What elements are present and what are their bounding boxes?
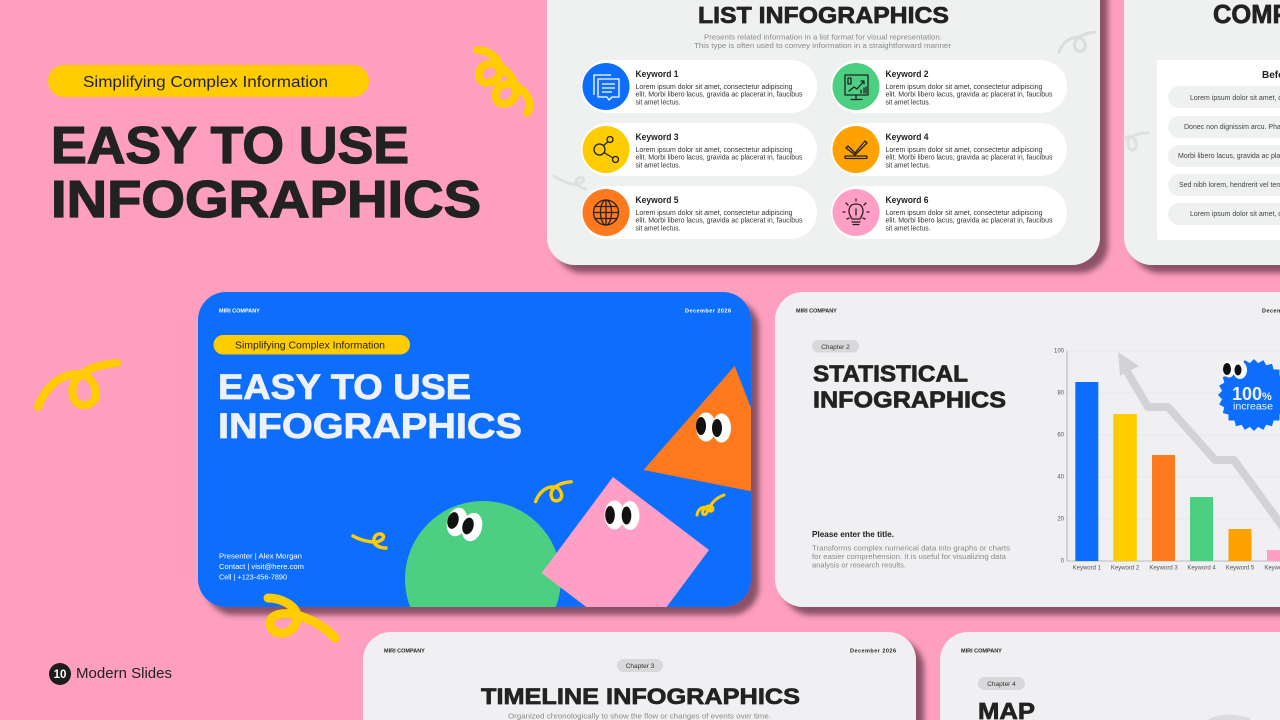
slide heading xyxy=(813,361,1006,412)
text block: Please enter the title. xyxy=(812,529,894,539)
slide count label xyxy=(49,663,172,685)
cover title: EASY TO USE xyxy=(218,368,471,407)
list item: keyword 2: Lorem ipsum dolor sit amet, consectetur adipiscing xyxy=(886,84,1043,91)
orange triangle character xyxy=(644,366,760,493)
list item: keyword 3 xyxy=(581,123,817,176)
faint map blob xyxy=(1208,715,1250,720)
subtitle pill xyxy=(48,65,369,97)
presenter details: Presenter | Alex Morgan xyxy=(219,552,302,560)
slide heading: STATISTICAL xyxy=(813,361,968,387)
bar chart: Keyword 2 xyxy=(1111,566,1140,572)
badge: 100% increase: increase xyxy=(1233,402,1273,412)
list item: keyword 1: sit amet lectus. xyxy=(636,99,681,106)
panel: list infographics slide xyxy=(547,0,1100,265)
main title xyxy=(51,117,481,229)
list item: keyword 1: Lorem ipsum dolor sit amet, consectetur adipiscing xyxy=(636,84,793,91)
text block: analysis or research results. xyxy=(812,560,906,570)
slide heading: TIMELINE INFOGRAPHICS xyxy=(481,684,800,709)
presenter details xyxy=(219,552,304,582)
subtitle pill xyxy=(214,335,410,354)
bar chart: 80 xyxy=(1057,390,1065,396)
character shapes xyxy=(405,366,751,607)
list item: keyword 5: Lorem ipsum dolor sit amet, consectetur adipiscing xyxy=(636,210,793,217)
badge: 100% increase: 100% xyxy=(1232,384,1272,404)
bar chart: Keyword 1 xyxy=(1073,566,1102,572)
list item: keyword 2: elit. Morbi libero lacus, gravida ac placerat in, faucibus xyxy=(886,92,1053,99)
list item: keyword 5: sit amet lectus. xyxy=(636,225,681,232)
panel: timeline slide: MIRI COMPANY xyxy=(384,648,425,654)
icon: monitor chart xyxy=(845,75,868,100)
yellow squiggle: small e-curl xyxy=(353,534,386,548)
list item: keyword 3: Keyword 3 xyxy=(636,132,678,142)
subtitle pill: Simplifying Complex Information xyxy=(83,74,328,91)
list item: keyword 1: elit. Morbi libero lacus, gravida ac placerat in, faucibus xyxy=(636,92,803,99)
panel: map slide: MIRI COMPANY xyxy=(961,648,1002,654)
green circle character xyxy=(405,501,560,607)
list item: keyword 3: Lorem ipsum dolor sit amet, consectetur adipiscing xyxy=(636,147,793,154)
panel: blue cover slide: MIRI COMPANY xyxy=(219,309,260,315)
chapter tag: Chapter 3 xyxy=(626,663,655,670)
bar chart: 0 xyxy=(1061,558,1065,564)
presenter details: Contact | visit@here.com xyxy=(219,562,304,571)
chapter tag xyxy=(978,677,1025,690)
slide count label: Modern Slides xyxy=(76,666,172,682)
yellow squiggle: small loop xyxy=(536,482,571,502)
bar chart: Keyword 3 xyxy=(1149,566,1178,572)
badge: 100% increase xyxy=(1218,359,1280,431)
list item: keyword 6: Lorem ipsum dolor sit amet, consectetur adipiscing xyxy=(886,210,1043,217)
list item: keyword 2: Keyword 2 xyxy=(886,69,928,79)
panel: map slide xyxy=(940,632,1280,720)
text block xyxy=(812,529,1010,570)
main title: EASY TO USE xyxy=(51,117,409,175)
yellow squiggle: top coil xyxy=(477,50,530,113)
faint squiggle decoration xyxy=(1059,32,1095,52)
list item: keyword 6 xyxy=(831,186,1067,239)
panel: blue cover slide xyxy=(198,292,760,657)
slide heading: LIST INFOGRAPHICS xyxy=(698,2,949,28)
list item: keyword 5: elit. Morbi libero lacus, gravida ac placerat in, faucibus xyxy=(636,218,803,225)
panel: blue cover slide: December 2026 xyxy=(685,309,731,315)
yellow squiggle: large below cover xyxy=(268,598,335,638)
chapter tag: Chapter 2 xyxy=(821,344,850,351)
faint squiggle decoration xyxy=(1125,133,1148,150)
list item: keyword 4 xyxy=(831,123,1067,176)
text block: Transforms complex numerical data into graphs or charts xyxy=(812,544,1010,553)
panel: statistical slide xyxy=(775,292,1280,607)
panel: comparison slide xyxy=(1124,0,1280,265)
slide count label: 10 xyxy=(54,669,66,681)
subtitle pill: Simplifying Complex Information xyxy=(235,340,385,352)
list item: keyword 4: sit amet lectus. xyxy=(886,162,931,169)
list item: keyword 4: elit. Morbi libero lacus, gravida ac placerat in, faucibus xyxy=(886,155,1053,162)
bar chart: 100 xyxy=(1054,348,1065,354)
white comparison table xyxy=(1157,60,1280,240)
cover title: INFOGRAPHICS xyxy=(218,407,522,446)
chapter tag xyxy=(617,659,663,672)
bar chart: Keyword 5 xyxy=(1226,566,1255,572)
cover title xyxy=(218,368,522,446)
slide description: This type is often used to convey information in a straightforward manner xyxy=(694,41,952,50)
list item: keyword 1 xyxy=(581,60,817,113)
text block: for easier comprehension. It is useful for visualizing data xyxy=(812,552,1007,561)
list item: keyword 6: elit. Morbi libero lacus, gravida ac placerat in, faucibus xyxy=(886,218,1053,225)
list item: keyword 4: Lorem ipsum dolor sit amet, consectetur adipiscing xyxy=(886,147,1043,154)
yellow squiggle: small coil xyxy=(697,495,724,515)
list item: keyword 1: Keyword 1 xyxy=(636,69,678,79)
list item: keyword 5: Keyword 5 xyxy=(636,195,678,205)
main title: INFOGRAPHICS xyxy=(51,171,481,229)
list item: keyword 3: elit. Morbi libero lacus, gravida ac placerat in, faucibus xyxy=(636,155,803,162)
presenter details: Cell | +123-456-7890 xyxy=(219,572,287,582)
icon: check mark xyxy=(845,141,867,158)
pink square character xyxy=(542,477,709,607)
list item: keyword 4: Keyword 4 xyxy=(886,132,928,142)
yellow squiggle: left loop xyxy=(38,363,117,407)
icon: light bulb xyxy=(843,199,869,224)
icon: globe xyxy=(594,200,618,225)
faint squiggle decoration xyxy=(554,176,586,189)
gray trend arrow xyxy=(1118,352,1280,550)
bar chart: 40 xyxy=(1057,474,1065,480)
icon: chat bubbles xyxy=(594,75,619,100)
chapter tag: Chapter 4 xyxy=(987,681,1016,688)
slide heading: INFOGRAPHICS xyxy=(813,386,1006,412)
slide description: Presents related information in a list format for visual representation. xyxy=(704,32,942,42)
bar chart: 20 xyxy=(1057,516,1065,522)
list item: keyword 6: Keyword 6 xyxy=(886,195,928,205)
bar chart: Keyword 4 xyxy=(1187,566,1216,572)
list item: keyword 2: sit amet lectus. xyxy=(886,99,931,106)
list item: keyword 6: sit amet lectus. xyxy=(886,225,931,232)
icon: share nodes xyxy=(594,136,618,162)
list item: keyword 5 xyxy=(581,186,817,239)
list item: keyword 2 xyxy=(831,60,1067,113)
bar chart: 60 xyxy=(1057,432,1065,438)
chapter tag xyxy=(812,340,859,352)
slide description xyxy=(694,32,952,50)
panel: timeline slide xyxy=(363,632,916,720)
list item: keyword 3: sit amet lectus. xyxy=(636,162,681,169)
panel: timeline slide: December 2026 xyxy=(850,648,896,654)
bar chart xyxy=(1054,348,1280,572)
panel: statistical slide: MIRI COMPANY xyxy=(796,309,837,315)
